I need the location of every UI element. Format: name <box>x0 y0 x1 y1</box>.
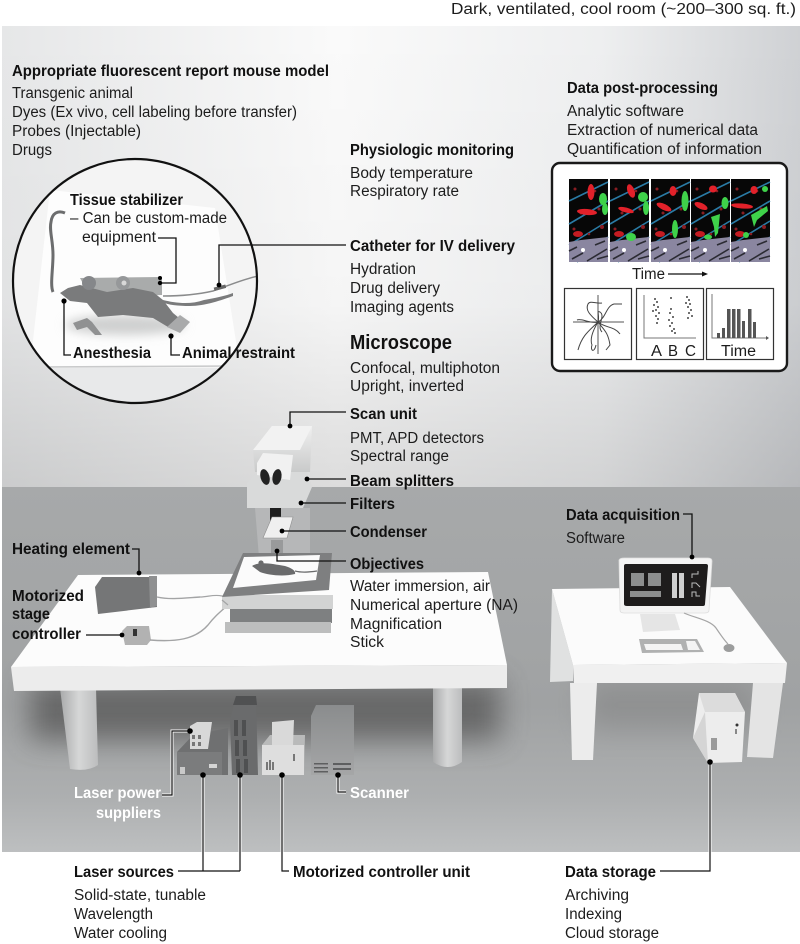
small mouse <box>252 560 317 575</box>
label: animal restraint <box>168 333 295 362</box>
label: laser sources <box>74 772 243 942</box>
text block: catheter: Imaging agents <box>350 299 454 316</box>
label: objectives: Magnification <box>350 616 442 633</box>
text block: physiologic monitoring <box>350 142 514 200</box>
room note: Dark, ventilated, cool room (~200–300 sq. ft.) <box>451 1 796 18</box>
panel: data post-processing results <box>552 163 787 371</box>
inset circle: mouse on stage <box>0 159 260 410</box>
scan unit <box>253 426 312 472</box>
text block: data post-processing: Data post-processing <box>567 80 718 97</box>
text block: catheter: Catheter for IV delivery <box>350 238 515 255</box>
cable to microscope <box>200 595 228 605</box>
label: data acquisition <box>566 507 694 559</box>
leader: laser power suppliers: suppliers <box>96 805 161 822</box>
label: data storage <box>565 759 713 942</box>
front right leg <box>747 683 783 758</box>
floor shadow under computer table <box>585 680 755 730</box>
label: objectives: Objectives <box>350 556 424 573</box>
eyepieces <box>259 468 271 486</box>
table front <box>573 663 787 683</box>
label: objectives: Water immersion, air <box>350 578 490 595</box>
chart: ABC scatter: B <box>668 343 678 360</box>
stage plate <box>222 553 332 597</box>
text block: mouse model: Transgenic animal <box>12 85 133 102</box>
text block: mouse model: Appropriate fluorescent report mouse model <box>12 63 329 80</box>
label: filters: Filters <box>350 496 395 513</box>
icon: plate stabilizer <box>80 277 162 297</box>
main table <box>11 572 507 770</box>
label: tissue stabilizer: Tissue stabilizer <box>70 192 183 209</box>
label: heating element: Heating element <box>12 541 130 558</box>
icon: motorized controller <box>262 735 305 775</box>
front left leg <box>570 683 597 760</box>
background: room floor <box>2 487 800 852</box>
label: scan unit: Scan unit <box>350 406 417 423</box>
label: scan unit: PMT, APD detectors <box>350 430 484 447</box>
text block: mouse model: Dyes (Ex vivo, cell labeling before transfer) <box>12 104 297 121</box>
icon: mouse <box>50 212 233 335</box>
label: condenser <box>280 524 427 541</box>
icon: joystick stage controller <box>122 605 228 645</box>
label: heating element <box>12 541 141 575</box>
text block: physiologic monitoring: Body temperature <box>350 165 473 182</box>
label: laser sources: Water cooling <box>74 925 167 942</box>
label: objectives: Stick <box>350 634 384 651</box>
label: motorized stage controller: stage <box>12 606 50 623</box>
text block: microscope: Microscope <box>350 332 452 354</box>
floor shadow under main table <box>30 680 500 740</box>
icon: scanner <box>311 705 354 775</box>
label: laser sources: Solid-state, tunable <box>74 887 206 904</box>
icon: tall laser source <box>230 696 258 775</box>
icon: computer monitor <box>619 558 734 653</box>
chart: time histogram: Time <box>721 343 756 360</box>
chart: time histogram <box>706 288 774 360</box>
chart: cell tracks <box>564 288 632 360</box>
label: objectives <box>275 549 518 651</box>
text block: mouse model: Probes (Injectable) <box>12 123 141 140</box>
label: scan unit <box>288 406 484 465</box>
axis label: time arrow: Time <box>632 266 665 283</box>
chart: ABC scatter <box>636 288 704 360</box>
label: beam splitters: Beam splitters <box>350 473 454 490</box>
label: condenser: Condenser <box>350 524 427 541</box>
text block: catheter: Drug delivery <box>350 280 440 297</box>
label: data storage: Cloud storage <box>565 925 659 942</box>
text block: data post-processing: Quantification of information <box>567 141 762 158</box>
label: scan unit: Spectral range <box>350 448 449 465</box>
label: laser sources: Wavelength <box>74 906 153 923</box>
text block: catheter <box>350 238 515 316</box>
label: tissue stabilizer: – Can be custom-made <box>70 210 227 227</box>
label: data storage: Archiving <box>565 887 629 904</box>
text block: data post-processing: Analytic software <box>567 103 684 120</box>
head <box>247 472 312 508</box>
label: laser sources: Laser sources <box>74 864 174 881</box>
label: data storage: Indexing <box>565 906 622 923</box>
label: data storage: Data storage <box>565 864 656 881</box>
label: motorized stage controller: controller <box>12 626 81 643</box>
text block: physiologic monitoring: Respiratory rate <box>350 183 459 200</box>
label: tissue stabilizer: equipment <box>82 229 157 246</box>
image strip: time-lapse frames <box>569 179 770 262</box>
label: filters <box>299 496 395 513</box>
chart: ABC scatter: A <box>651 343 663 360</box>
text block: data post-processing: Extraction of numerical data <box>567 122 758 139</box>
label: data acquisition: Data acquisition <box>566 507 680 524</box>
icon: data storage tower <box>693 693 745 763</box>
stage base <box>222 595 333 609</box>
equipment under table <box>177 696 354 775</box>
chart: ABC scatter: C <box>685 343 696 360</box>
label: motorized controller unit: Motorized controller unit <box>293 864 470 881</box>
text block: catheter: Hydration <box>350 261 416 278</box>
text block: mouse model: Drugs <box>12 142 52 159</box>
text block: data post-processing <box>567 80 762 158</box>
label: animal restraint: Animal restraint <box>182 345 295 362</box>
table front <box>11 665 507 691</box>
text block: mouse model <box>12 63 329 159</box>
icon: laser source box <box>177 728 228 775</box>
leader: catheter <box>217 245 346 287</box>
table leg left <box>60 688 98 770</box>
label: tissue stabilizer <box>70 192 227 285</box>
text block: microscope <box>350 332 500 395</box>
label: motorized stage controller: Motorized <box>12 588 84 605</box>
label: beam splitters <box>305 473 454 490</box>
icon: microscope <box>222 426 333 633</box>
label: data acquisition: Software <box>566 530 625 547</box>
text block: microscope: Confocal, multiphoton <box>350 360 500 377</box>
label: motorized controller unit <box>279 772 470 881</box>
icon: heating element <box>95 576 200 614</box>
eyepiece module <box>257 453 293 480</box>
computer table <box>550 587 787 760</box>
label: anesthesia <box>61 298 151 362</box>
back leg <box>550 589 573 682</box>
objective <box>270 508 281 524</box>
mouse and cable <box>684 613 728 644</box>
condenser plate <box>263 517 293 538</box>
background: room wall <box>2 26 800 488</box>
table top <box>552 587 787 665</box>
icon: laser power supplier <box>190 722 212 749</box>
text block: physiologic monitoring: Physiologic monitoring <box>350 142 514 159</box>
keyboard <box>639 639 704 653</box>
axis label: time arrow <box>632 266 708 283</box>
label: objectives: Numerical aperture (NA) <box>350 597 518 614</box>
leader: laser power suppliers: Laser power <box>74 785 161 802</box>
label: anesthesia: Anesthesia <box>73 345 151 362</box>
table leg right <box>433 688 462 767</box>
label: motorized stage controller <box>12 588 124 643</box>
column <box>255 508 310 570</box>
label: scanner <box>335 772 409 802</box>
table top <box>11 572 507 667</box>
leader: laser power suppliers <box>74 728 193 822</box>
label: scanner: Scanner <box>350 785 409 802</box>
text block: microscope: Upright, inverted <box>350 378 464 395</box>
